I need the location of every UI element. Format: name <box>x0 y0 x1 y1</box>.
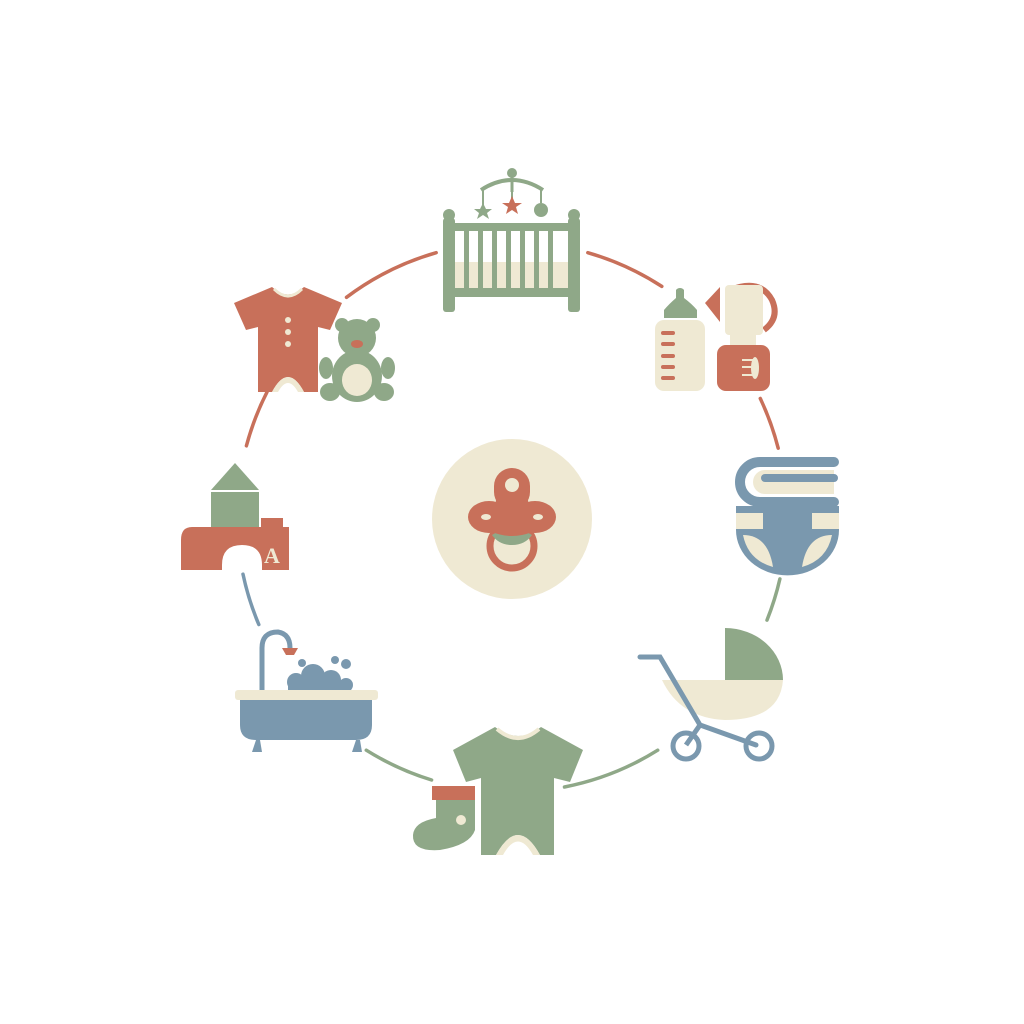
icon: onesie and teddy bear <box>234 287 395 402</box>
icon: toy blocks: A <box>264 543 280 568</box>
icon: toy blocks <box>181 463 289 570</box>
icon: crib with mobile <box>443 168 580 312</box>
icon: bathtub <box>235 632 378 752</box>
icon: green onesie and sock <box>413 727 583 855</box>
icon: stroller <box>640 628 783 759</box>
center: pacifier badge <box>432 439 592 599</box>
icon: bottle and breast pump <box>655 285 775 391</box>
icon: blanket and diaper <box>736 462 839 575</box>
icon: pacifier <box>468 468 556 568</box>
